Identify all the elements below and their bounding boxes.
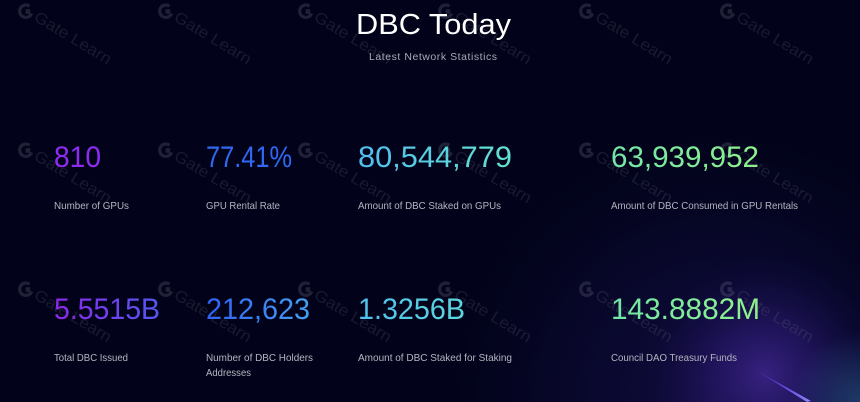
stat: DBC holder addresses	[206, 293, 313, 379]
stat: DBC holder addresses: 212,623	[206, 293, 310, 326]
stat: number of GPUs	[54, 141, 129, 212]
stat: total DBC issued: 5.5515B	[54, 293, 160, 326]
title: DBC Today	[356, 9, 512, 41]
stat: council DAO treasury funds: Council DAO Treasury Funds	[611, 352, 737, 364]
stat: total DBC issued: Total DBC Issued	[54, 352, 128, 364]
watermarks	[20, 5, 816, 346]
stat: GPU rental rate: 77.41%	[206, 141, 292, 174]
stat: DBC consumed in GPU rentals: 63,939,952	[611, 141, 759, 174]
stat: DBC consumed in GPU rentals	[611, 141, 798, 212]
stat: DBC holder addresses: Number of DBC Holders	[206, 352, 313, 364]
stat: council DAO treasury funds	[611, 293, 760, 364]
stat: DBC staked on GPUs	[358, 141, 512, 212]
stat: number of GPUs: Number of GPUs	[54, 200, 129, 212]
stat: GPU rental rate	[206, 141, 292, 212]
stat: number of GPUs: 810	[54, 141, 101, 174]
stat: DBC holder addresses: Addresses	[206, 367, 251, 379]
stat: council DAO treasury funds: 143.8882M	[611, 293, 760, 326]
stat: GPU rental rate: GPU Rental Rate	[206, 200, 280, 212]
stat: DBC staked for staking: Amount of DBC Staked for Staking	[358, 352, 512, 364]
stat: DBC staked on GPUs: 80,544,779	[358, 141, 512, 174]
stat: DBC staked for staking	[358, 293, 512, 364]
stat: DBC consumed in GPU rentals: Amount of DBC Consumed in GPU Rentals	[611, 200, 798, 212]
stat: DBC staked for staking: 1.3256B	[358, 293, 465, 326]
background glow	[420, 100, 860, 402]
stat: DBC staked on GPUs: Amount of DBC Staked on GPUs	[358, 200, 501, 212]
subtitle: Latest Network Statistics	[369, 51, 497, 63]
stat: total DBC issued	[54, 293, 160, 364]
